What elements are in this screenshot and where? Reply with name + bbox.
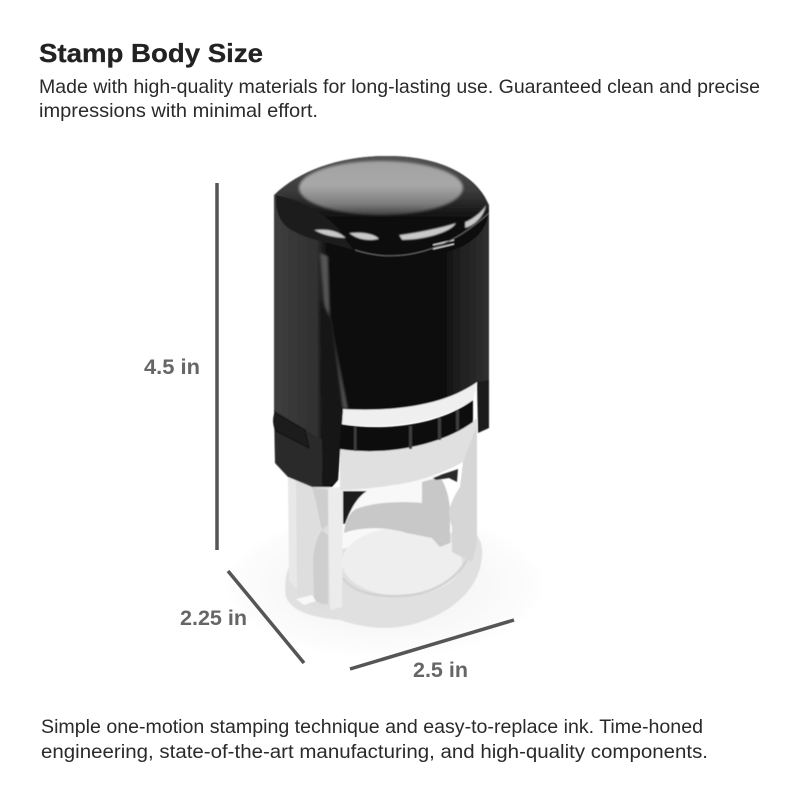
right leg	[449, 423, 477, 562]
left dark mechanism	[343, 491, 367, 524]
cap lower edge	[355, 213, 489, 256]
intro text block: Made with high-quality materials for long-lasting use. Guaranteed clean and precise	[39, 76, 760, 98]
intro text block	[39, 76, 760, 122]
dial ribs	[354, 410, 459, 451]
depth dimension line	[228, 571, 304, 663]
hinge pillar	[328, 487, 343, 610]
cap window	[299, 161, 463, 215]
cap slot	[433, 240, 454, 249]
right inner dark mechanism	[433, 469, 458, 482]
light collar band	[340, 418, 477, 490]
stamp illustration	[272, 155, 490, 629]
hinge shadow details	[312, 487, 328, 604]
black dial	[340, 400, 473, 451]
width label: 2.5 in	[413, 659, 468, 682]
title: Stamp Body Size	[39, 38, 263, 68]
depth label: 2.25 in	[180, 607, 247, 630]
wing dark seam	[320, 300, 343, 487]
width dimension line	[350, 620, 514, 669]
base ring	[285, 530, 482, 628]
intro text block: impressions with minimal effort.	[39, 100, 318, 122]
cap dome	[277, 156, 489, 258]
cap highlights	[314, 205, 486, 240]
white ring	[342, 382, 477, 426]
body reflections	[274, 253, 348, 487]
footer text block	[41, 717, 708, 763]
main black body	[274, 156, 489, 487]
window background	[343, 475, 452, 545]
footer text block: engineering, state-of-the-art manufacturing, and high-quality components.	[41, 742, 708, 763]
cap left lobe	[276, 195, 354, 250]
base clip	[296, 595, 316, 605]
wing lower shade	[274, 410, 322, 487]
footer text block: Simple one-motion stamping technique and easy-to-replace ink. Time-honed	[41, 717, 703, 738]
base inner rim	[343, 558, 468, 596]
right wing	[477, 376, 489, 433]
left hinge assembly	[288, 477, 330, 610]
height label: 4.5 in	[144, 356, 200, 379]
height dimension line	[215, 183, 219, 550]
grey strip	[320, 253, 348, 409]
hinge outer strip	[288, 477, 297, 590]
side button	[274, 413, 309, 448]
rear arch	[344, 477, 450, 547]
base inner floor	[342, 528, 462, 596]
ground shadow	[220, 510, 550, 660]
